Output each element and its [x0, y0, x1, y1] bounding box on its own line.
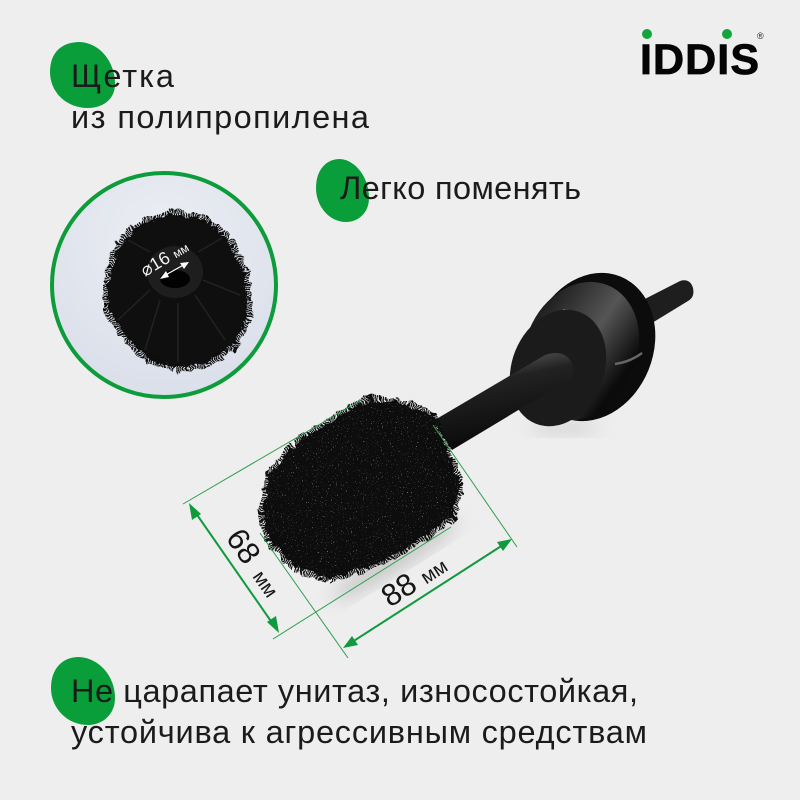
label: 68 mm: мм [248, 567, 282, 602]
text: benefits: устойчива к агрессивным средствам [71, 714, 647, 750]
flange [507, 254, 677, 440]
label: 88 mm: мм [417, 555, 452, 589]
small brush bristles [108, 214, 247, 368]
green blob: heading top [50, 42, 115, 108]
rear shaft [637, 280, 693, 323]
cap highlight top [563, 310, 590, 324]
green blob: easy replace [316, 159, 369, 222]
green blob: bottom text [51, 657, 115, 725]
product: handle and cap [433, 254, 693, 450]
front shaft [433, 353, 574, 450]
logo: IDDIS: ® [757, 31, 764, 41]
cap highlight side [615, 353, 642, 364]
diameter label [137, 236, 192, 280]
bristle fringe [265, 402, 458, 576]
text: benefits: Не царапает унитаз, износостойкая, [71, 673, 638, 709]
dimension arrow: 68 [189, 503, 279, 633]
text: easy to replace: Легко поменять [340, 170, 581, 206]
heading: brush material [71, 58, 370, 135]
inset: brush head close-up [52, 173, 276, 397]
label: 68 mm [219, 522, 291, 603]
label: 88 mm [375, 546, 453, 614]
heading: brush material: Щетка [71, 58, 175, 94]
label: 88 mm: 88 [375, 566, 423, 614]
cap front face [493, 295, 623, 441]
dimension arrow: 88 [343, 539, 512, 648]
diameter label: ⌀16 [137, 247, 174, 280]
shadow under brush [326, 512, 464, 608]
small brush core [110, 216, 245, 366]
small brush hub [147, 246, 203, 298]
cap cone [502, 264, 660, 438]
text: benefits [71, 673, 647, 750]
logo: IDDIS: IDDIS [640, 36, 759, 84]
label: 68 mm: 68 [219, 522, 268, 570]
diameter label: мм [170, 241, 192, 261]
dimension: guide lines [183, 399, 517, 658]
small brush radial creases [118, 238, 240, 362]
brush core [265, 402, 458, 576]
small brush hole [160, 270, 190, 288]
product: brush head [265, 402, 458, 576]
diameter arrow [160, 262, 189, 279]
heading: brush material: из полипропилена [71, 99, 370, 135]
